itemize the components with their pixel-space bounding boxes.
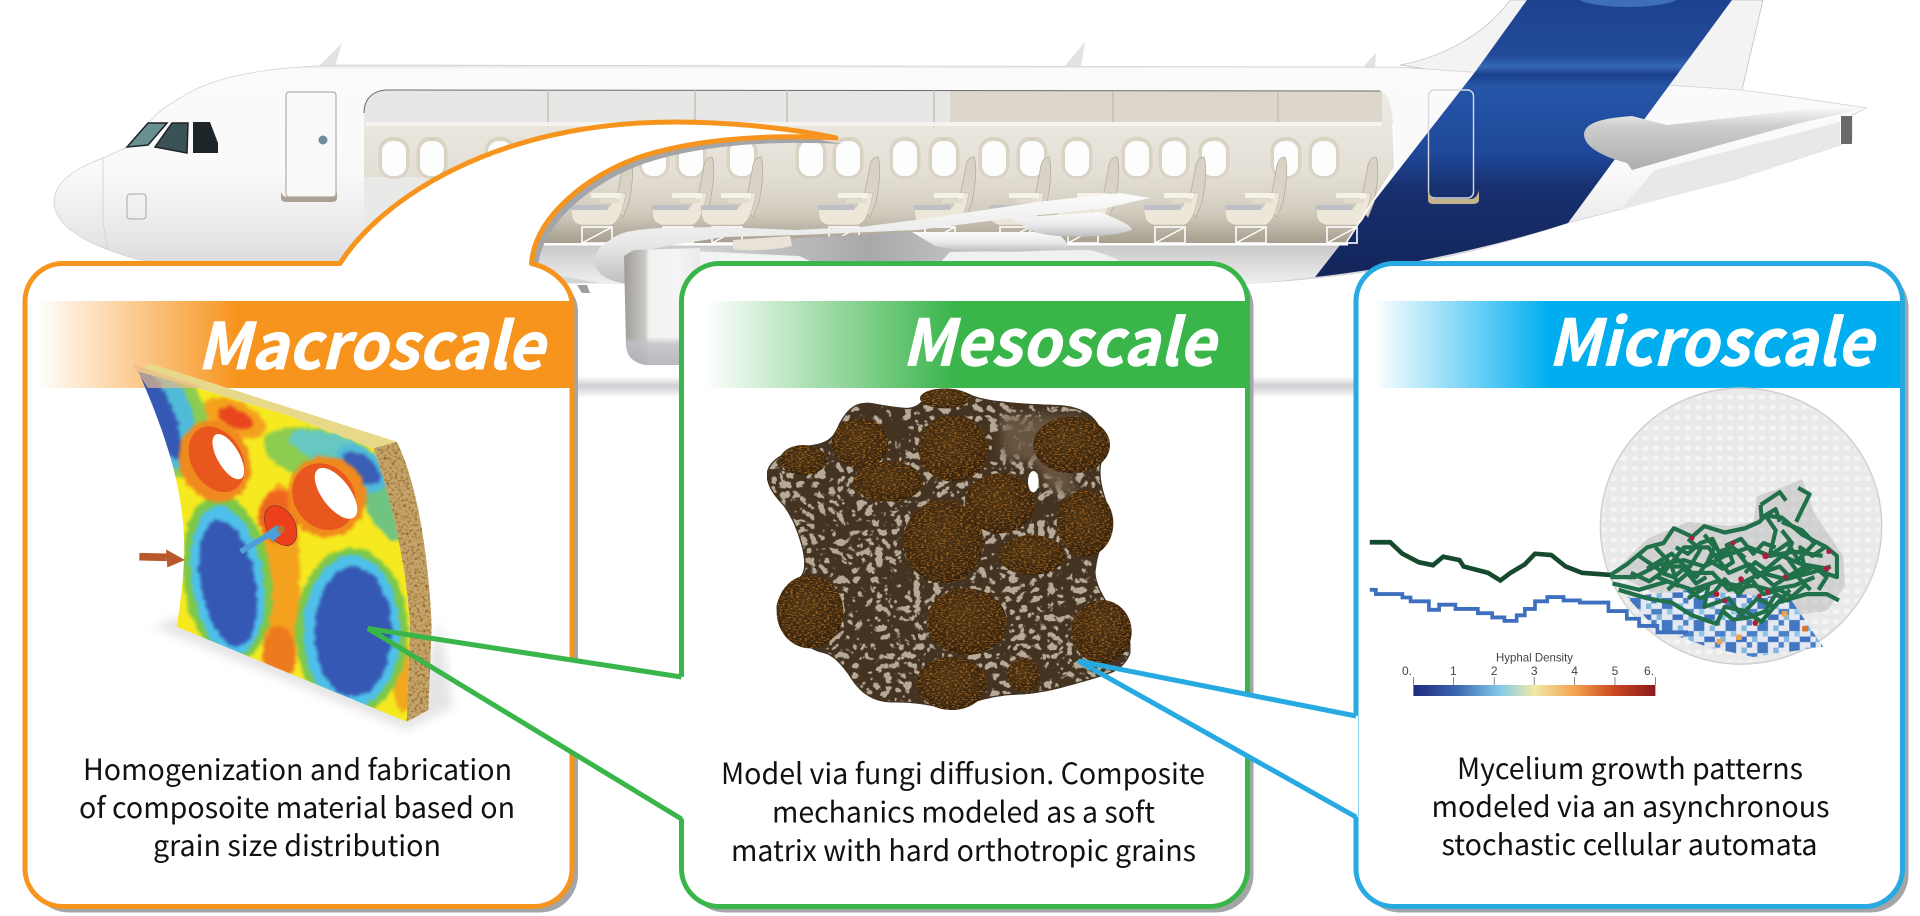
galley panel — [364, 177, 430, 232]
blue load arrow — [241, 525, 285, 552]
description — [79, 747, 515, 865]
front door — [281, 92, 337, 202]
overhead bins, rear — [950, 91, 1382, 123]
panel body — [682, 264, 1248, 906]
description: matrix with hard orthotropic grains — [731, 828, 1196, 870]
bin lower rail — [366, 122, 1382, 126]
tail logo highlight — [1576, 0, 1680, 7]
matrix — [767, 390, 1130, 707]
callout lines from mesoscale lump — [1078, 661, 1356, 817]
plate holes — [177, 416, 369, 551]
bin dividers — [548, 90, 1278, 127]
cabin interior — [364, 90, 1395, 246]
fungal composite lump — [767, 388, 1132, 710]
fade of plate top under heading band — [132, 364, 205, 388]
panel body — [1356, 264, 1902, 906]
heading band — [1374, 301, 1900, 388]
horizontal stabilizer — [1584, 107, 1867, 170]
hyphal density colour bar: Hyphal Density — [1496, 650, 1573, 664]
ground shadow — [470, 376, 1410, 398]
fuselage — [54, 65, 1867, 283]
description: modeled via an asynchronous — [1432, 784, 1830, 826]
plate thickness edge — [373, 442, 432, 722]
hyphal density colour bar: 6. — [1644, 664, 1654, 678]
description: mechanics modeled as a soft — [772, 790, 1155, 832]
hyphae envelope — [1613, 479, 1845, 624]
wing underside shadow — [700, 232, 1040, 284]
overhead bins, front — [364, 90, 950, 123]
plate stress heatmap — [138, 372, 410, 722]
description — [1432, 746, 1830, 864]
heading: Mesoscale — [902, 292, 1220, 384]
orange load arrow — [139, 549, 185, 567]
wing — [594, 193, 1150, 285]
passenger seats — [571, 157, 1378, 243]
panel shadow — [688, 270, 1254, 912]
projected hypha trace — [1370, 590, 1688, 632]
description: Mycelium growth patterns — [1457, 746, 1803, 788]
description: stochastic cellular automata — [1442, 822, 1818, 864]
description: of composoite material based on — [79, 785, 515, 827]
nose hatch — [127, 194, 146, 219]
airplane cutaway illustration — [54, 0, 1867, 398]
nacelle top behind wing — [672, 250, 860, 284]
panel: macroscale — [25, 122, 842, 912]
nose panel line — [103, 158, 108, 250]
antennas on the fuselage roof — [319, 42, 1376, 68]
tail cone end — [1841, 116, 1852, 144]
callout fill — [1140, 673, 1358, 817]
panel: microscale — [1078, 264, 1908, 912]
hyphal density colour bar: 1 — [1450, 664, 1457, 678]
cabin right edge — [1346, 125, 1395, 243]
description: Homogenization and fabrication — [83, 747, 512, 789]
hyphal tips — [1690, 535, 1831, 626]
cabin windows — [378, 137, 1340, 179]
panel shadow — [1362, 270, 1908, 912]
tail fin — [1400, 0, 1763, 90]
cockpit windows — [127, 122, 218, 153]
callout fill — [452, 642, 684, 819]
panel outline with callout to cabin — [25, 122, 836, 906]
panel: mesoscale — [368, 264, 1254, 912]
plate ground shadow — [153, 617, 453, 730]
plate top edge — [138, 363, 397, 448]
cabin wall — [364, 90, 1395, 243]
wing flap detail — [733, 236, 792, 250]
cabin floor — [470, 243, 1348, 246]
description — [721, 751, 1205, 870]
hyphal density colour bar: 2 — [1491, 664, 1498, 678]
hyphal density colour bar: 0. — [1402, 664, 1412, 678]
description: grain size distribution — [153, 823, 441, 865]
rear fuselage underside — [1620, 122, 1840, 210]
hyphal density colour bar — [1402, 650, 1655, 696]
heading band — [705, 301, 1245, 388]
panel shadow — [31, 128, 842, 912]
blue tail livery stripe — [1315, 0, 1732, 277]
rear door — [1428, 90, 1479, 204]
hyphal density colour bar: 4 — [1571, 664, 1578, 678]
hyphal density colour bar: 5 — [1612, 664, 1619, 678]
simulated composite plate — [107, 344, 453, 733]
through hole — [1028, 471, 1039, 492]
engine nacelle — [624, 248, 700, 365]
sphere voxel texture — [1602, 390, 1880, 662]
description: Model via fungi diffusion. Composite — [721, 751, 1205, 793]
tan upper right matrix — [1000, 415, 1090, 495]
projected density map — [1627, 590, 1823, 657]
hyphal density colour bar: 3 — [1531, 664, 1538, 678]
cabin top edge — [364, 90, 1380, 113]
engine strut — [577, 285, 590, 293]
belly below cabin floor — [530, 245, 1340, 283]
hyphal network — [1610, 488, 1839, 624]
grains — [777, 388, 1132, 710]
heading: Macroscale — [197, 296, 549, 388]
wing fairing pods — [912, 212, 1132, 284]
mycelium growth simulation — [1370, 388, 1882, 664]
heading band — [37, 301, 570, 388]
substrate sphere — [1600, 388, 1882, 664]
heading: Microscale — [1548, 292, 1878, 384]
callout lines from macroscale plate — [368, 628, 682, 819]
main hypha — [1370, 542, 1610, 580]
